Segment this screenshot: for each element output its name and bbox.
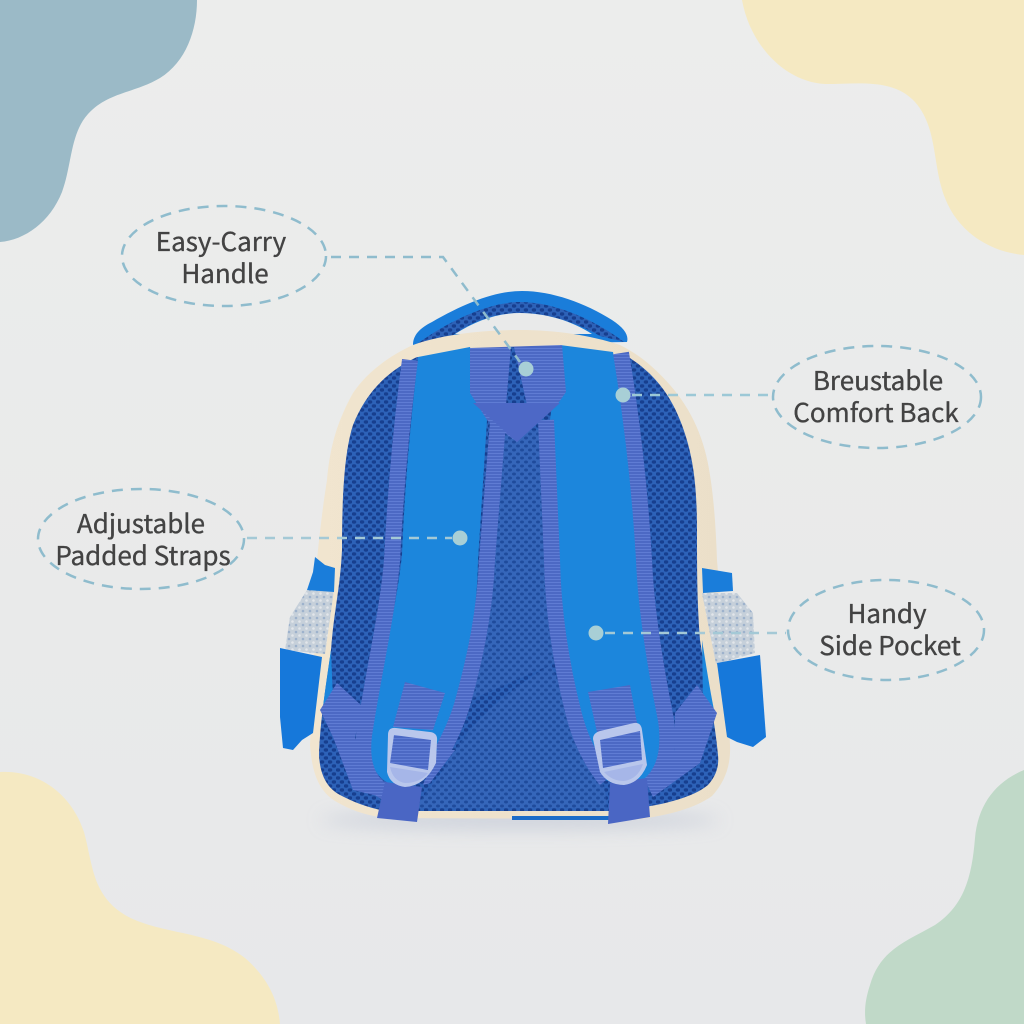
ground shadow bbox=[320, 812, 720, 828]
backpack bbox=[280, 291, 766, 828]
callout: handy side pocket: Side Pocket bbox=[819, 626, 961, 663]
hanging loop bbox=[470, 345, 566, 442]
handle bbox=[413, 291, 627, 345]
left buckle bbox=[377, 682, 445, 822]
callout: breathable comfort back: Breustable bbox=[813, 361, 943, 398]
left padded strap bbox=[370, 347, 487, 786]
back mesh panel bbox=[319, 355, 718, 811]
webbing edge: left outer bbox=[363, 360, 410, 792]
side wing strap right bbox=[645, 685, 717, 797]
side wing strap left bbox=[320, 683, 382, 797]
webbing tail: left bbox=[423, 750, 455, 785]
leader line: handle bbox=[331, 257, 534, 376]
centre mesh bbox=[415, 430, 607, 808]
callout: breathable comfort back: Comfort Back bbox=[793, 393, 959, 430]
callout: easy-carry handle: Easy-Carry bbox=[156, 222, 287, 259]
corner blob: top right bbox=[742, 0, 1024, 255]
webbing edge: left inner bbox=[442, 422, 498, 752]
callout: adjustable padded straps: Padded Straps bbox=[55, 536, 231, 573]
leader line: comfort back bbox=[616, 388, 772, 402]
webbing edge: right inner bbox=[546, 420, 606, 780]
corner blob: bottom left bbox=[0, 772, 280, 1024]
right side pocket bbox=[702, 568, 766, 747]
callout: handy side pocket bbox=[788, 580, 984, 680]
webbing edge: right outer bbox=[621, 353, 667, 786]
right buckle bbox=[588, 685, 650, 824]
bag body trim bbox=[310, 330, 730, 819]
leader line: side pocket bbox=[588, 626, 786, 640]
corner blob: top left bbox=[0, 0, 197, 242]
blue side edges near pockets bbox=[322, 640, 714, 715]
right padded strap bbox=[550, 345, 668, 786]
callout: adjustable padded straps: Adjustable bbox=[77, 504, 205, 541]
callout: breathable comfort back bbox=[773, 346, 981, 448]
callout: adjustable padded straps bbox=[38, 489, 244, 589]
leader line: straps bbox=[247, 530, 468, 546]
callout: easy-carry handle: Handle bbox=[181, 254, 269, 291]
blue bottom edge bbox=[512, 816, 610, 820]
callout: easy-carry handle bbox=[122, 206, 326, 306]
callout: handy side pocket: Handy bbox=[847, 594, 927, 631]
left side pocket bbox=[280, 557, 335, 750]
corner blob: bottom right bbox=[865, 770, 1024, 1024]
